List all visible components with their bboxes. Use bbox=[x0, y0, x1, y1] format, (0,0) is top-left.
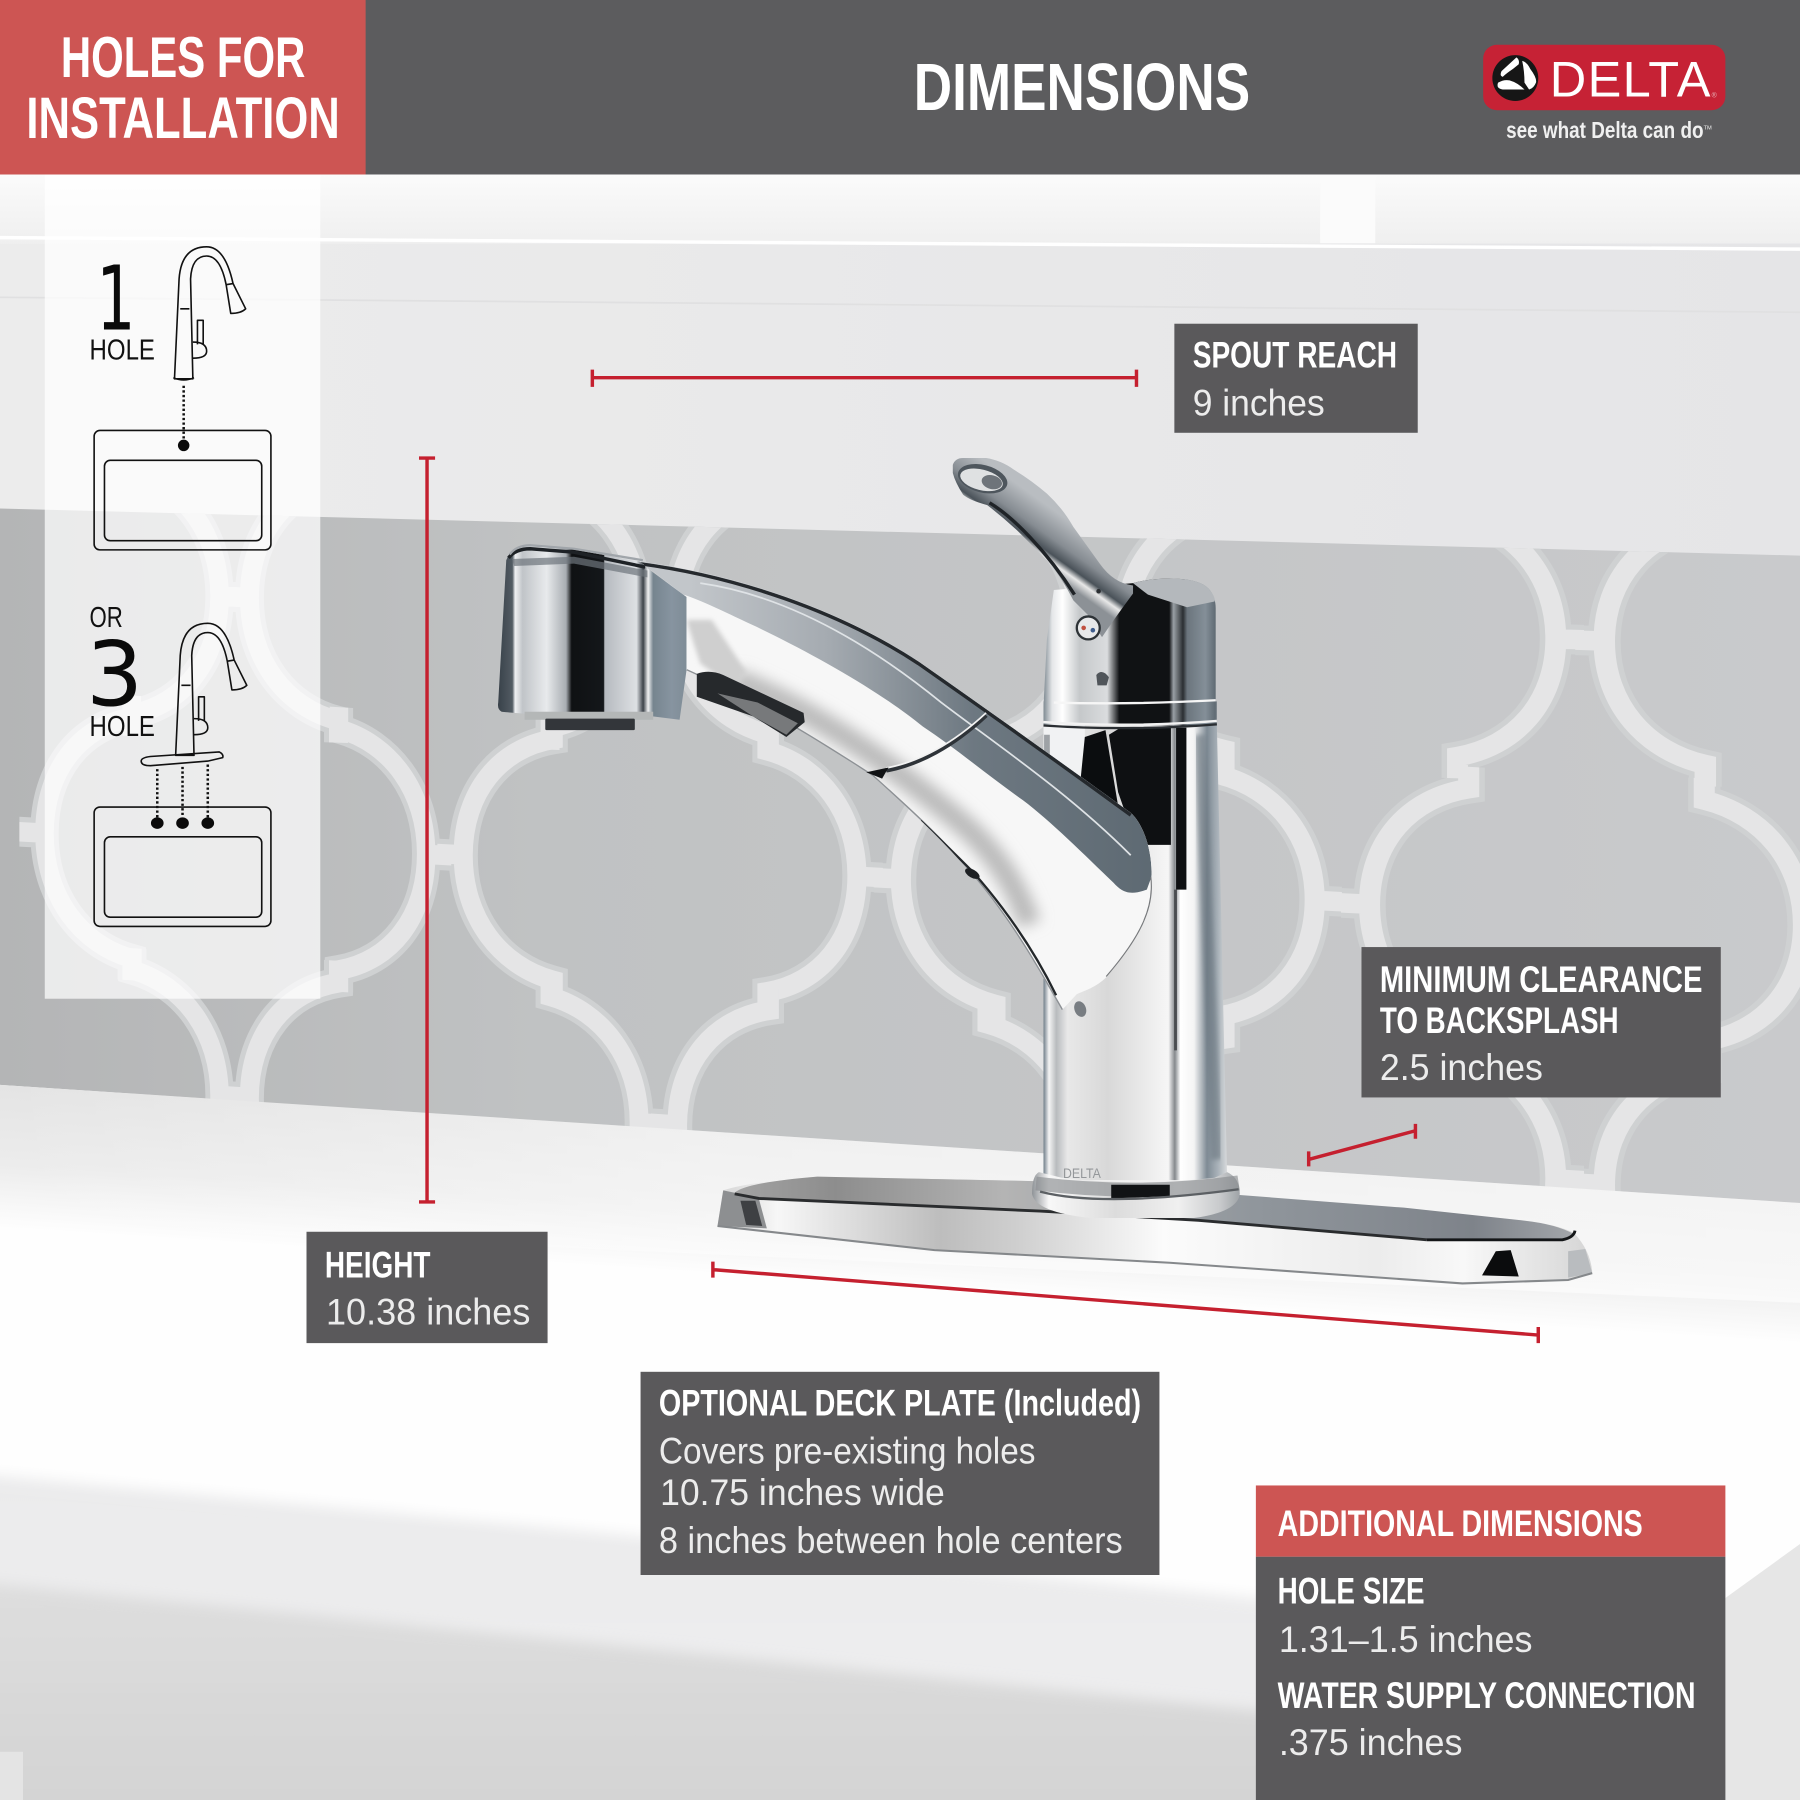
background: white countertop bbox=[0, 1085, 1800, 1800]
icon: three hole faucet bbox=[141, 623, 247, 766]
label: minimum clearance: 2.5 inches bbox=[1380, 1047, 1543, 1088]
label: optional deck plate: OPTIONAL DECK PLATE (Included) bbox=[659, 1382, 1141, 1423]
icon: single hole sink bbox=[94, 386, 271, 550]
label: minimum clearance: TO BACKSPLASH bbox=[1380, 1000, 1619, 1041]
label: minimum clearance: MINIMUM CLEARANCE bbox=[1380, 959, 1702, 1000]
label: optional deck plate: Covers pre-existing holes bbox=[659, 1431, 1035, 1472]
faucet lower column bbox=[1043, 723, 1227, 1180]
spout gasket bbox=[870, 713, 986, 777]
one hole label: HOLE bbox=[90, 334, 155, 366]
label: optional deck plate: 10.75 inches wide bbox=[660, 1472, 945, 1513]
faucet upper cap bbox=[1043, 579, 1217, 728]
label: optional deck plate bbox=[641, 1372, 1159, 1575]
Delta logo bbox=[1483, 45, 1725, 143]
faucet pull-down button bbox=[697, 672, 805, 737]
icon: three hole sink bbox=[94, 765, 271, 926]
Delta logo: ® bbox=[1712, 92, 1717, 100]
Delta logo: TM bbox=[1704, 126, 1712, 132]
icon: single hole faucet bbox=[173, 247, 246, 380]
faucet base collar bbox=[1032, 1166, 1240, 1218]
panel: additional dimensions: .375 inches bbox=[1279, 1722, 1462, 1763]
background: arabesque tile wall bbox=[0, 508, 1800, 1203]
faucet spray head bbox=[498, 545, 686, 730]
faucet base collar: DELTA bbox=[1063, 1166, 1102, 1181]
label: optional deck plate: 8 inches between hole centers bbox=[659, 1520, 1123, 1561]
label: height: HEIGHT bbox=[325, 1245, 431, 1286]
label: spout reach: SPOUT REACH bbox=[1193, 334, 1397, 375]
panel: holes for installation bbox=[45, 174, 320, 999]
title: holes for installation bbox=[26, 26, 340, 151]
dimension line: deck plate bbox=[713, 1262, 1538, 1343]
header bar bbox=[0, 0, 1800, 174]
panel: additional dimensions bbox=[1256, 1485, 1725, 1800]
Delta logo: DELTA bbox=[1550, 50, 1711, 107]
panel: additional dimensions: HOLE SIZE bbox=[1278, 1571, 1425, 1612]
three hole label: HOLE bbox=[90, 711, 155, 743]
faucet spout bbox=[639, 561, 1152, 1019]
label: spout reach bbox=[1174, 324, 1418, 433]
dimension line: height bbox=[419, 458, 435, 1202]
label: spout reach: 9 inches bbox=[1193, 383, 1325, 424]
panel: additional dimensions: ADDITIONAL DIMENSIONS bbox=[1278, 1503, 1643, 1544]
faucet handle bbox=[953, 458, 1133, 639]
faucet bbox=[498, 458, 1592, 1283]
background: upper wall bbox=[0, 174, 1800, 565]
faucet deck plate bbox=[717, 1177, 1592, 1283]
Delta logo: see what Delta can do bbox=[1506, 117, 1704, 143]
dimension line: backsplash clearance bbox=[1309, 1124, 1415, 1166]
dimension line: spout reach bbox=[592, 370, 1136, 387]
red title block bbox=[0, 0, 366, 174]
label: minimum clearance bbox=[1361, 947, 1721, 1097]
label: height: 10.38 inches bbox=[326, 1292, 530, 1333]
title: holes for installation: INSTALLATION bbox=[26, 86, 340, 151]
three hole number: 3 bbox=[86, 623, 143, 727]
title: dimensions: DIMENSIONS bbox=[914, 51, 1250, 125]
additional dimensions heading bbox=[1256, 1485, 1725, 1557]
or label: OR bbox=[90, 602, 123, 634]
title: holes for installation: HOLES FOR bbox=[61, 26, 305, 90]
label: height bbox=[307, 1232, 548, 1343]
one hole number: 1 bbox=[96, 247, 135, 351]
panel: additional dimensions: 1.31–1.5 inches bbox=[1279, 1619, 1533, 1660]
